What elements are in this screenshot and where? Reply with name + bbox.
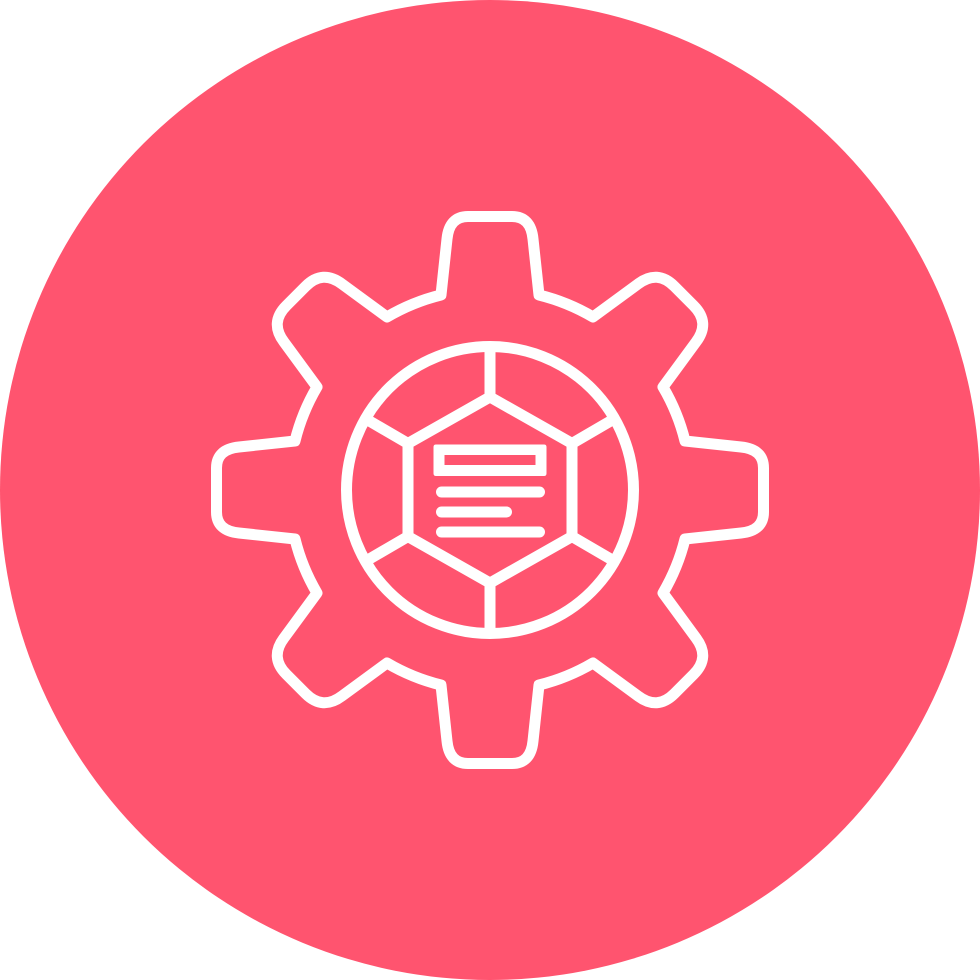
central hexagon (408, 397, 572, 583)
gear icon group (216, 216, 764, 764)
hexagon spokes (366, 348, 614, 632)
document title box (434, 444, 546, 476)
document text lines (442, 492, 540, 532)
inner circle (346, 346, 634, 634)
gear outline (216, 216, 764, 764)
